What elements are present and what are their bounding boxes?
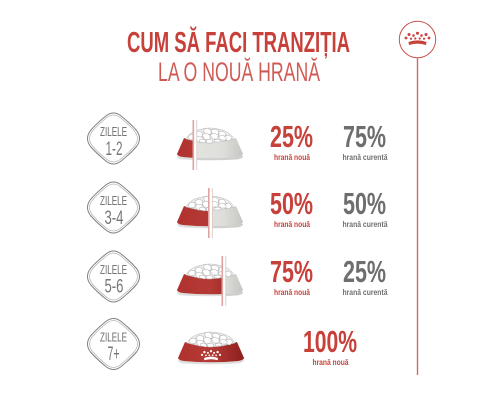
stat: 100 percent new food	[303, 324, 357, 367]
stat: 75 percent current food: hrană curentă	[342, 153, 388, 162]
stat: 25 percent new food: hrană nouă	[274, 153, 310, 162]
badge: zilele 3-4: 3-4	[104, 208, 124, 229]
badge: zilele 7+: 7+	[108, 344, 120, 365]
badge: zilele 7+: ZILELE	[100, 330, 127, 344]
stat: 100 percent new food: 100%	[303, 324, 357, 359]
badge: zilele 3-4	[88, 182, 140, 233]
stat: 50 percent new food: 50%	[270, 186, 313, 221]
badge: zilele 3-4: ZILELE	[100, 194, 127, 208]
stat: 75 percent current food: 75%	[343, 119, 386, 154]
stat: 75 percent new food: 75%	[270, 254, 313, 289]
bowl: 25 percent new food	[177, 120, 243, 170]
row 1: days 1-2	[88, 113, 388, 170]
row 4: days 7+	[88, 318, 357, 370]
badge: zilele 5-6	[88, 251, 140, 302]
stat: 25 percent current food: hrană curentă	[342, 288, 388, 297]
bowl: 75 percent new food	[177, 256, 243, 306]
row 2: days 3-4	[88, 182, 388, 238]
stat: 25 percent new food	[270, 119, 313, 162]
badge: zilele 1-2: ZILELE	[100, 125, 127, 139]
icon: royal crown badge with vertical line	[399, 21, 436, 375]
bowl: 50 percent new food	[177, 188, 243, 238]
stat: 50 percent current food: hrană curentă	[342, 220, 388, 229]
badge: zilele 7+	[88, 318, 140, 370]
stat: 75 percent new food	[270, 254, 313, 297]
badge: zilele 1-2: 1-2	[106, 139, 122, 160]
stat: 50 percent current food	[342, 186, 388, 229]
stat: 25 percent new food: 25%	[270, 119, 313, 154]
stat: 25 percent current food: 25%	[343, 254, 386, 289]
row 3: days 5-6	[88, 251, 388, 306]
bowl: 100 percent new food with crown	[178, 332, 244, 364]
stat: 100 percent new food: hrană nouă	[312, 358, 349, 367]
badge: zilele 5-6: ZILELE	[100, 263, 127, 277]
stat: 50 percent new food	[270, 186, 313, 229]
title	[127, 26, 350, 87]
title: CUM SĂ FACI TRANZIȚIA	[127, 26, 350, 59]
stat: 50 percent current food: 50%	[343, 186, 386, 221]
badge: zilele 1-2	[88, 113, 140, 164]
stat: 50 percent new food: hrană nouă	[274, 220, 310, 229]
stat: 75 percent current food	[342, 119, 388, 162]
badge: zilele 5-6: 5-6	[104, 276, 124, 298]
stat: 75 percent new food: hrană nouă	[274, 288, 310, 297]
stat: 25 percent current food	[342, 254, 388, 297]
title: LA O NOUĂ HRANĂ	[158, 57, 320, 87]
